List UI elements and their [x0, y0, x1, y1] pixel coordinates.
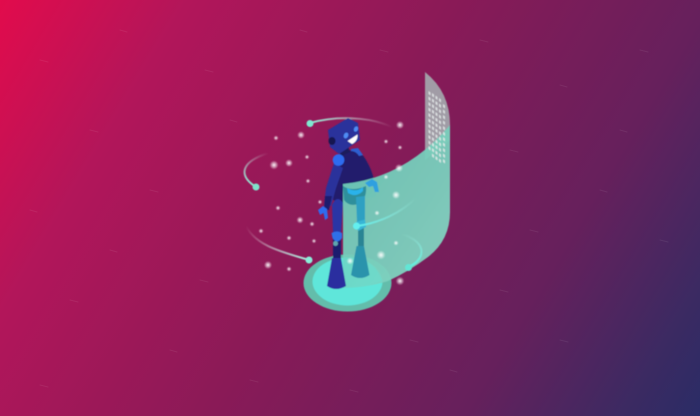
knee: [356, 220, 366, 231]
right shoulder: [351, 148, 363, 156]
sparkle particles: [258, 121, 404, 285]
holographic panel: upper grey section: [425, 72, 450, 160]
neck: [338, 146, 350, 156]
left hand: [318, 206, 328, 220]
platform disc: [304, 254, 392, 312]
head: [328, 118, 360, 154]
robot upper body: [318, 118, 376, 232]
thigh: [356, 196, 365, 222]
torso: [333, 150, 376, 204]
knee: [332, 232, 342, 242]
left thigh: [332, 199, 343, 232]
right orbit arc: [353, 198, 416, 230]
boot: [351, 246, 370, 278]
robot left lower leg: [327, 232, 346, 289]
boot: [327, 258, 346, 289]
left forearm: [324, 196, 332, 210]
shin: [358, 228, 364, 247]
hologram scene: [245, 72, 450, 312]
robot right leg: [343, 186, 370, 278]
disc seen through panel: [343, 258, 382, 288]
pelvis: [343, 186, 366, 205]
lower right orbit arc: [402, 234, 422, 271]
robot right hand: [365, 179, 379, 192]
left orbit arc: [245, 153, 268, 190]
shin: [333, 236, 341, 260]
top orbit arc: [306, 118, 392, 127]
mouth: [348, 134, 358, 144]
ear: [328, 137, 336, 145]
left arm: [324, 163, 343, 206]
robot left hand on panel: [347, 187, 363, 195]
shoulder joint: [333, 154, 344, 166]
lower orbit arc: [246, 226, 312, 264]
holographic panel: window grid: [428, 91, 445, 164]
eyes: [343, 132, 349, 139]
background speckles: [30, 30, 668, 392]
holographic panel: teal section: [343, 125, 450, 288]
